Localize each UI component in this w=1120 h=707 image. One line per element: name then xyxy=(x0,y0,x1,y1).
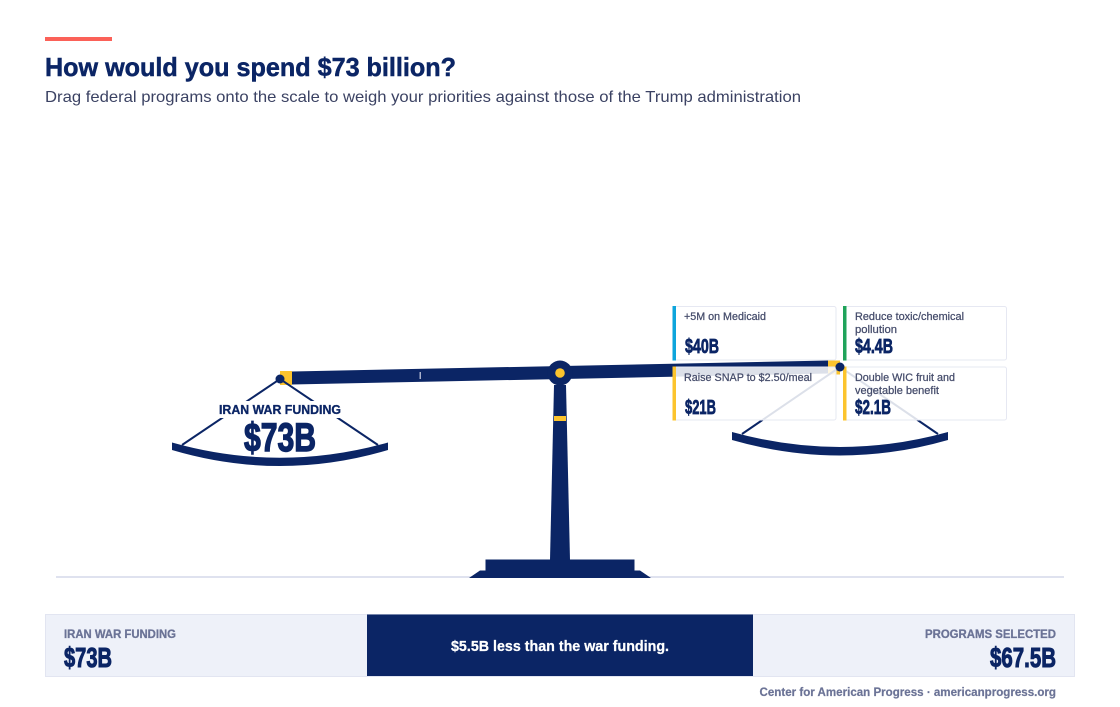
card: WIC xyxy=(843,366,1006,420)
footer credit: Center for American Progress · americanprogress.org xyxy=(760,687,1056,699)
card: WIC: $2.1B xyxy=(855,397,891,419)
summary panel: difference xyxy=(367,614,753,676)
summary panel: programs selected: PROGRAMS SELECTED xyxy=(925,627,1056,641)
column marker xyxy=(554,416,566,421)
left pan label: IRAN WAR FUNDING xyxy=(219,403,341,417)
accent bar xyxy=(45,37,112,41)
card: WIC: Double WIC fruit and xyxy=(855,372,955,384)
left pan xyxy=(172,374,388,466)
right pan pivot xyxy=(836,362,844,372)
summary panel: war funding: $73B xyxy=(64,642,112,673)
card: Medicaid xyxy=(672,306,836,360)
pivot xyxy=(548,360,572,386)
summary panel: programs selected: $67.5B xyxy=(990,642,1056,673)
summary panel: war funding: IRAN WAR FUNDING xyxy=(64,627,176,641)
card: SNAP: Raise SNAP to $2.50/meal xyxy=(684,372,812,384)
card: pollution: pollution xyxy=(855,324,897,336)
card: Medicaid: $40B xyxy=(685,336,719,358)
left pan dish xyxy=(172,442,388,466)
card: SNAP xyxy=(672,366,836,420)
scale beam xyxy=(292,360,829,384)
card: SNAP: $21B xyxy=(685,397,716,419)
title: How would you spend $73 billion? xyxy=(45,52,456,82)
beam tick xyxy=(420,372,421,379)
pivot centre xyxy=(555,368,565,378)
ground line xyxy=(56,576,1064,578)
right pan xyxy=(732,367,948,456)
summary panel: programs selected xyxy=(925,627,1056,673)
right beam cap xyxy=(828,360,840,374)
right pan ropes xyxy=(742,367,938,434)
card: pollution: $4.4B xyxy=(855,336,893,358)
summary bar xyxy=(46,614,1074,676)
right pan dish xyxy=(732,432,948,456)
left beam cap xyxy=(280,371,292,385)
left pan value: $73B xyxy=(244,416,316,460)
scale xyxy=(280,360,840,578)
scale base xyxy=(469,560,651,578)
card: WIC: vegetable benefit xyxy=(855,385,939,397)
summary panel: difference: $5.5B less than the war funding. xyxy=(451,639,669,655)
card: pollution: Reduce toxic/chemical xyxy=(855,311,964,323)
left pan pivot xyxy=(276,374,284,384)
card: pollution xyxy=(843,306,1006,360)
card: Medicaid: +5M on Medicaid xyxy=(684,311,766,323)
subtitle: Drag federal programs onto the scale to weigh your priorities against those of the Trump administration xyxy=(45,89,801,106)
left pan ropes xyxy=(182,379,378,445)
scale column xyxy=(550,385,570,560)
summary panel: war funding xyxy=(46,614,1074,676)
left label backing xyxy=(216,401,344,418)
